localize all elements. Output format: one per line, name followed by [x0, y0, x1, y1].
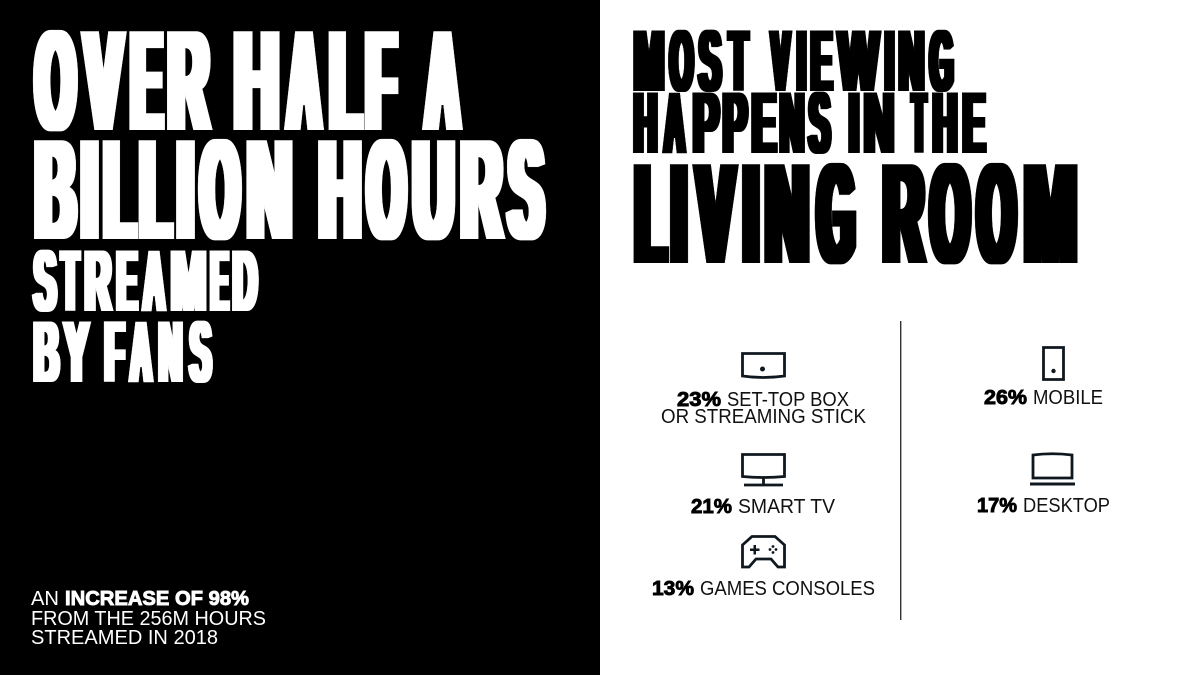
panel: left black	[0, 0, 600, 675]
label: 13% games consoles: 13%	[652, 578, 694, 600]
heading: over half a billion hours streamed by fans: E	[132, 2, 162, 160]
label: 17% desktop	[977, 495, 1110, 517]
label: 23% set-top box or streaming stick	[661, 389, 867, 428]
item: games consoles	[652, 536, 875, 600]
heading: over half a billion hours streamed by fans: O	[36, 2, 75, 160]
heading: over half a billion hours streamed by fans: O	[201, 110, 239, 270]
heading: most viewing happens in the living room: I	[744, 134, 758, 294]
label: 17% desktop: DESKTOP	[1023, 495, 1110, 517]
heading: over half a billion hours streamed by fans: L	[140, 110, 170, 270]
icon: smart tv	[742, 454, 784, 485]
heading: most viewing happens in the living room: A	[664, 76, 684, 172]
label: 21% smart tv: SMART TV	[738, 496, 836, 518]
heading: over half a billion hours streamed by fans: R	[462, 110, 502, 270]
heading: over half a billion hours streamed by fans: D	[233, 234, 257, 330]
heading: most viewing happens in the living room: G	[818, 134, 854, 294]
divider	[900, 321, 901, 620]
icon: game controller	[742, 536, 784, 567]
heading: over half a billion hours streamed by fans: M	[171, 234, 206, 330]
item: desktop	[977, 454, 1110, 517]
heading: most viewing happens in the living room: T	[730, 14, 748, 110]
heading: most viewing happens in the living room: S	[699, 14, 721, 110]
icon: mobile phone	[1044, 348, 1064, 380]
panel: left black: S	[509, 110, 543, 270]
heading: most viewing happens in the living room: G	[930, 14, 953, 110]
heading: most viewing happens in the living room: N	[766, 134, 808, 294]
heading: most viewing happens in the living room: N	[899, 14, 924, 110]
heading: most viewing happens in the living room: O	[670, 14, 693, 110]
heading: most viewing happens in the living room: I	[672, 134, 686, 294]
heading: over half a billion hours streamed by fans: F	[105, 304, 124, 400]
heading: over half a billion hours streamed by fans: R	[168, 2, 208, 160]
heading: over half a billion hours streamed by fans: H	[234, 2, 278, 160]
heading: over half a billion hours streamed by fans: I	[82, 110, 98, 270]
text block: increase of 98%: INCREASE OF 98%	[65, 588, 249, 610]
heading: over half a billion hours streamed by fans: L	[104, 110, 134, 270]
heading: over half a billion hours streamed by fans: E	[211, 234, 228, 330]
heading: most viewing happens in the living room: I	[849, 76, 859, 172]
text block: increase of 98%: FROM THE 256M HOURS	[31, 608, 266, 630]
heading: most viewing happens in the living room: T	[912, 76, 926, 172]
heading: most viewing happens in the living room: P	[693, 76, 719, 172]
heading: most viewing happens in the living room: L	[636, 134, 666, 294]
heading: over half a billion hours streamed by fans: A	[288, 2, 320, 160]
heading: over half a billion hours streamed by fans: R	[85, 234, 111, 330]
heading: most viewing happens in the living room: W	[838, 14, 879, 110]
heading: most viewing happens in the living room: H	[933, 76, 957, 172]
heading: most viewing happens in the living room	[634, 14, 1076, 294]
heading: over half a billion hours streamed by fans: B	[34, 304, 59, 400]
heading: most viewing happens in the living room: M	[634, 14, 664, 110]
heading: over half a billion hours streamed by fans: N	[159, 304, 182, 400]
heading: over half a billion hours streamed by fans: T	[62, 234, 78, 330]
heading: over half a billion hours streamed by fans	[34, 2, 543, 400]
heading: most viewing happens in the living room: I	[797, 14, 806, 110]
label: 17% desktop: 17%	[977, 495, 1017, 517]
label: 13% games consoles: GAMES CONSOLES	[700, 578, 875, 600]
heading: over half a billion hours streamed by fans: Y	[64, 304, 88, 400]
heading: most viewing happens in the living room: H	[634, 76, 657, 172]
heading: over half a billion hours streamed by fans: N	[248, 110, 292, 270]
label: 21% smart tv	[691, 496, 836, 518]
label: 26% mobile: MOBILE	[1033, 387, 1103, 409]
heading: over half a billion hours streamed by fans: A	[130, 304, 152, 400]
heading: most viewing happens in the living room: E	[752, 76, 776, 172]
text: M	[1024, 134, 1076, 294]
heading: over half a billion hours streamed by fans: U	[414, 110, 454, 270]
item: mobile	[984, 348, 1103, 409]
heading: over half a billion hours streamed by fans: E	[117, 234, 137, 330]
label: 26% mobile	[984, 387, 1103, 409]
heading: over half a billion hours streamed by fans: F	[366, 2, 396, 160]
label: 23% set-top box or streaming stick: 23%	[677, 389, 721, 411]
heading: over half a billion hours streamed by fans: S	[190, 304, 211, 400]
icon: laptop	[1030, 454, 1075, 486]
label: 21% smart tv: 21%	[691, 496, 732, 518]
heading: most viewing happens in the living room: O	[931, 134, 969, 294]
heading: most viewing happens in the living room: P	[723, 76, 747, 172]
heading: over half a billion hours streamed by fans: A	[426, 2, 459, 160]
heading: over half a billion hours streamed by fans: O	[368, 110, 405, 270]
heading: over half a billion hours streamed by fans: V	[85, 2, 122, 160]
label: 23% set-top box or streaming stick: OR STREAMING STICK	[661, 406, 867, 428]
heading: most viewing happens in the living room: N	[864, 76, 894, 172]
text block: increase of 98%: STREAMED IN 2018	[31, 627, 218, 649]
item: smart tv	[691, 454, 836, 518]
heading: over half a billion hours streamed by fans: A	[144, 234, 164, 330]
heading: over half a billion hours streamed by fans: H	[320, 110, 360, 270]
heading: over half a billion hours streamed by fans: L	[330, 2, 360, 160]
heading: most viewing happens in the living room: V	[772, 14, 790, 110]
heading: most viewing happens in the living room: E	[963, 76, 985, 172]
heading: most viewing happens in the living room: I	[885, 14, 894, 110]
text block: increase of 98%: AN	[31, 588, 59, 610]
label: 26% mobile: 26%	[984, 387, 1027, 409]
label: 23% set-top box or streaming stick: SET-TOP BOX	[727, 389, 849, 411]
heading: most viewing happens in the living room: S	[809, 76, 830, 172]
heading: most viewing happens in the living room: V	[697, 134, 734, 294]
heading: most viewing happens in the living room: N	[780, 76, 804, 172]
heading: over half a billion hours streamed by fans: B	[36, 110, 76, 270]
icon: set-top box	[742, 354, 784, 378]
heading: over half a billion hours streamed by fans: S	[34, 234, 56, 330]
heading: most viewing happens in the living room: E	[811, 14, 832, 110]
item: set-top box	[661, 354, 867, 428]
text block: increase of 98%	[31, 588, 266, 649]
heading: over half a billion hours streamed by fans: I	[178, 110, 194, 270]
heading: most viewing happens in the living room: O	[978, 134, 1015, 294]
heading: most viewing happens in the living room: R	[884, 134, 924, 294]
